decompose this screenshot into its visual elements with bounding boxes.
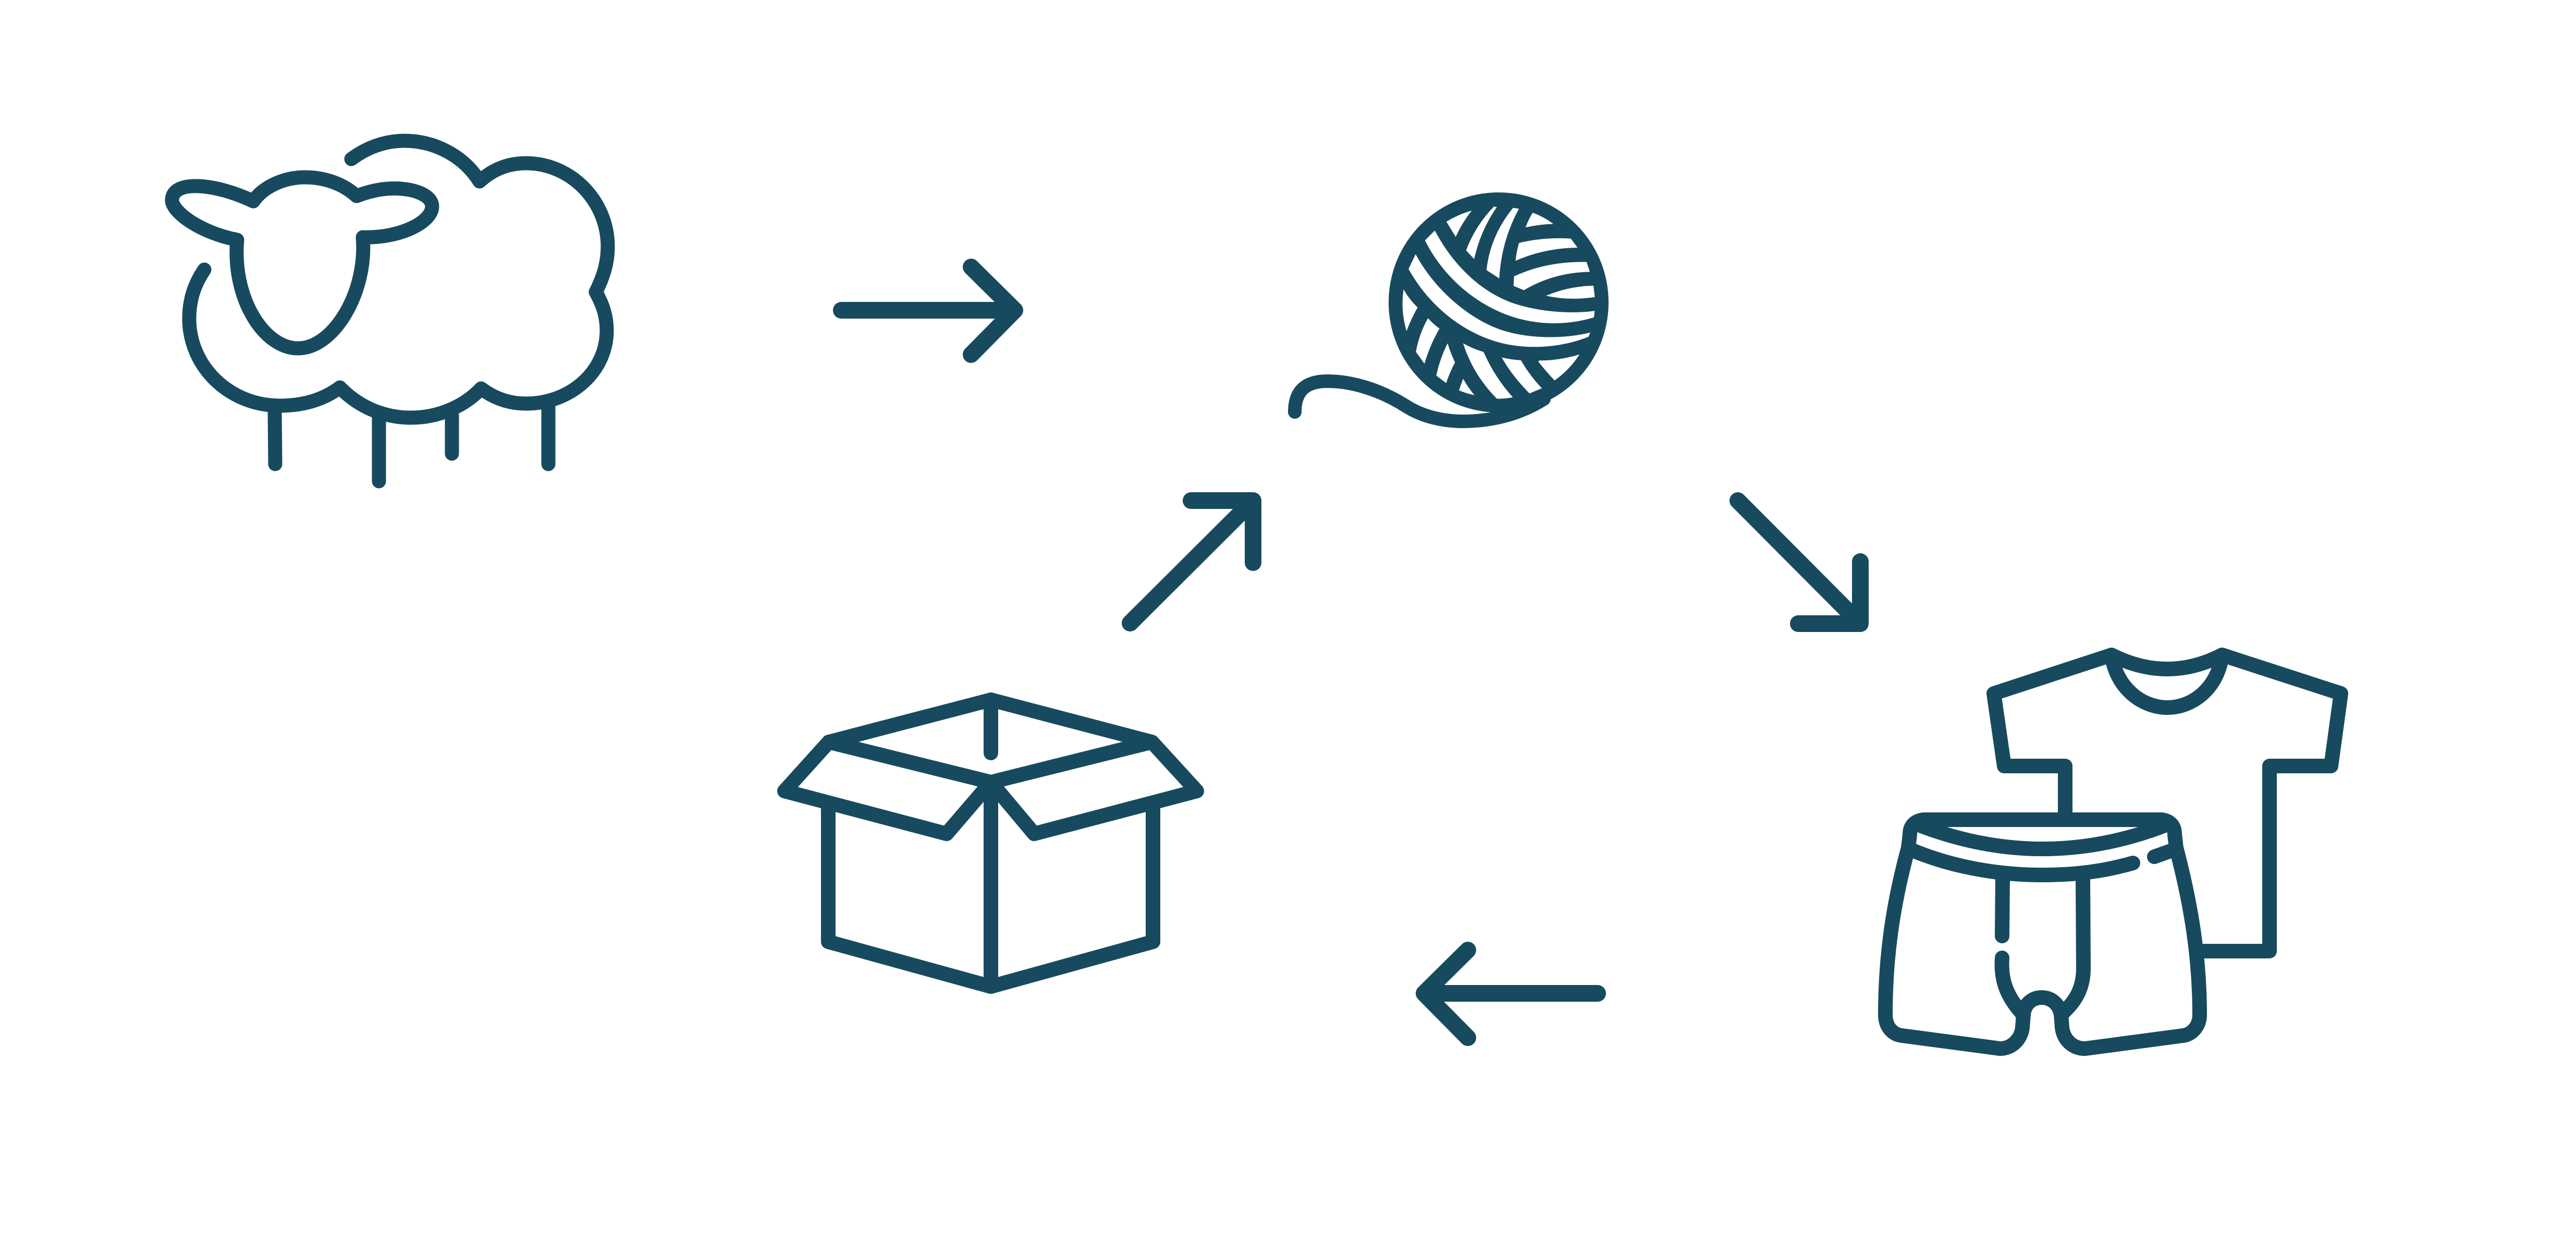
yarn ball disc	[1389, 192, 1609, 412]
sheep body	[189, 141, 608, 418]
box body	[828, 782, 1153, 987]
arrow: yarn to clothes	[1738, 501, 1860, 624]
icon: open cardboard box	[784, 700, 1197, 987]
t-shirt collar	[2112, 655, 2222, 708]
yarn tail	[1295, 381, 1544, 421]
yarn strands	[1403, 206, 1594, 399]
box top opening	[829, 700, 1152, 782]
icon: sheep	[172, 141, 608, 481]
shorts outline	[1885, 820, 2200, 1049]
shorts fly	[2002, 878, 2003, 936]
arrow: sheep to yarn	[841, 267, 1015, 355]
sheep legs	[275, 405, 548, 481]
t-shirt	[1994, 655, 2341, 951]
arrow: box to yarn	[1130, 501, 1253, 623]
box right flap	[991, 742, 1197, 834]
icon: yarn ball	[1295, 192, 1609, 421]
shorts waistband	[1919, 825, 2166, 849]
sheep head and ears	[172, 177, 432, 348]
icon: t-shirt and shorts	[1885, 655, 2341, 1049]
box left flap	[784, 742, 991, 834]
arrow: clothes to box	[1424, 950, 1598, 1038]
